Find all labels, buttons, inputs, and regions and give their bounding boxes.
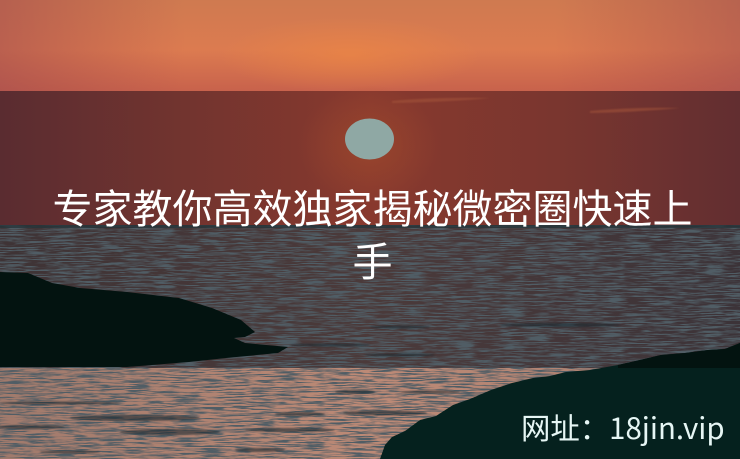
sea band [0,85,740,225]
rippling water [0,225,740,459]
title: 专家教你高效独家揭秘微密圈快速上手 [52,177,692,288]
left island silhouette [0,272,288,367]
sky [0,0,740,93]
website watermark: 网址：18jin.vip [521,406,725,448]
right headland silhouette [380,343,740,459]
sun [345,118,394,160]
darker headland band above the overlay edge [618,343,740,368]
